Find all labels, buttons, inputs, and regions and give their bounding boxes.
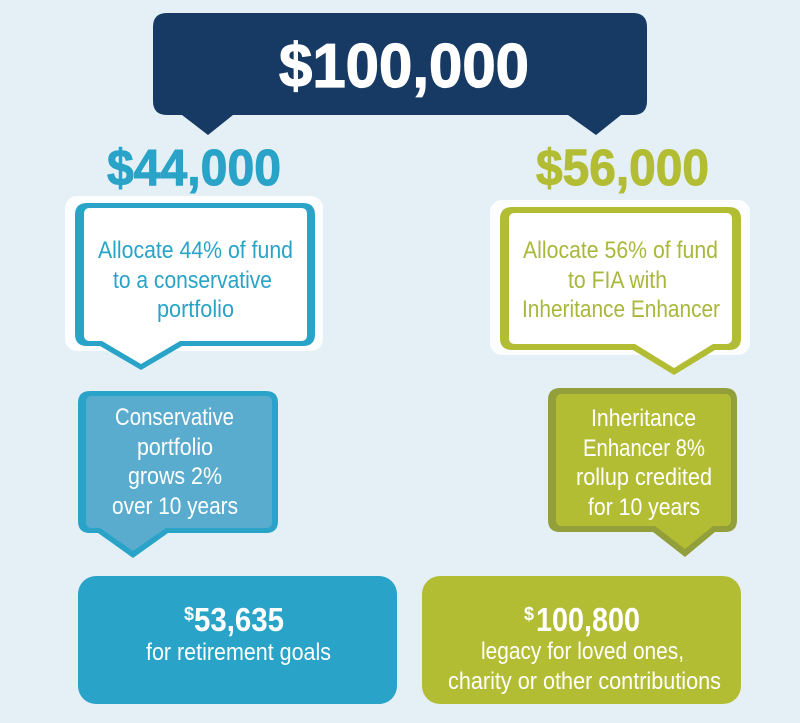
text: conservative portfolio growth [112,404,238,520]
text: inheritance enhancer rollup: rollup credited [576,464,712,491]
text: inheritance enhancer rollup: Inheritance [591,405,696,432]
text: legacy description [448,638,721,695]
text: allocate 44%: portfolio [157,296,234,323]
callout: inheritance enhancer rollup [548,388,737,557]
callout: conservative portfolio growth [78,391,278,558]
text: inheritance enhancer rollup: Enhancer 8% [583,435,705,462]
amount: $53,635: 53,635 [194,601,284,638]
text: inheritance enhancer rollup [576,405,712,521]
heading: $56,000: $56,000 [536,139,709,196]
callout: allocate 56% [490,200,750,375]
text: allocate 56%: Allocate 56% of fund [523,237,718,264]
text: conservative portfolio growth: Conservative [115,404,234,431]
text: allocate 56% [522,237,720,323]
text: for retirement goals: for retirement goals [146,639,331,666]
text: allocate 56%: to FIA with [568,267,667,294]
amount: $53,635: $ [184,604,194,624]
text: legacy description: charity or other contributions [448,668,721,695]
text: allocate 44%: to a conservative [113,267,272,294]
text: inheritance enhancer rollup: for 10 years [588,494,700,521]
result panel: legacy [422,576,741,704]
text: legacy description: legacy for loved ones, [481,638,684,665]
heading: $44,000: $44,000 [107,139,281,196]
banner: total amount [153,13,647,135]
amount: $100,800: 100,800 [536,601,640,638]
text: allocate 44% [98,237,293,323]
text: conservative portfolio growth: grows 2% [128,463,222,490]
text: allocate 56%: Inheritance Enhancer [522,296,720,323]
amount: $100,800: $ [524,604,534,624]
callout: allocate 44% [65,196,323,370]
result panel: retirement goals [78,576,397,704]
text: conservative portfolio growth: portfolio [137,434,213,461]
text: conservative portfolio growth: over 10 years [112,493,238,520]
title: $100,000: $100,000 [279,32,529,101]
text: allocate 44%: Allocate 44% of fund [98,237,293,264]
